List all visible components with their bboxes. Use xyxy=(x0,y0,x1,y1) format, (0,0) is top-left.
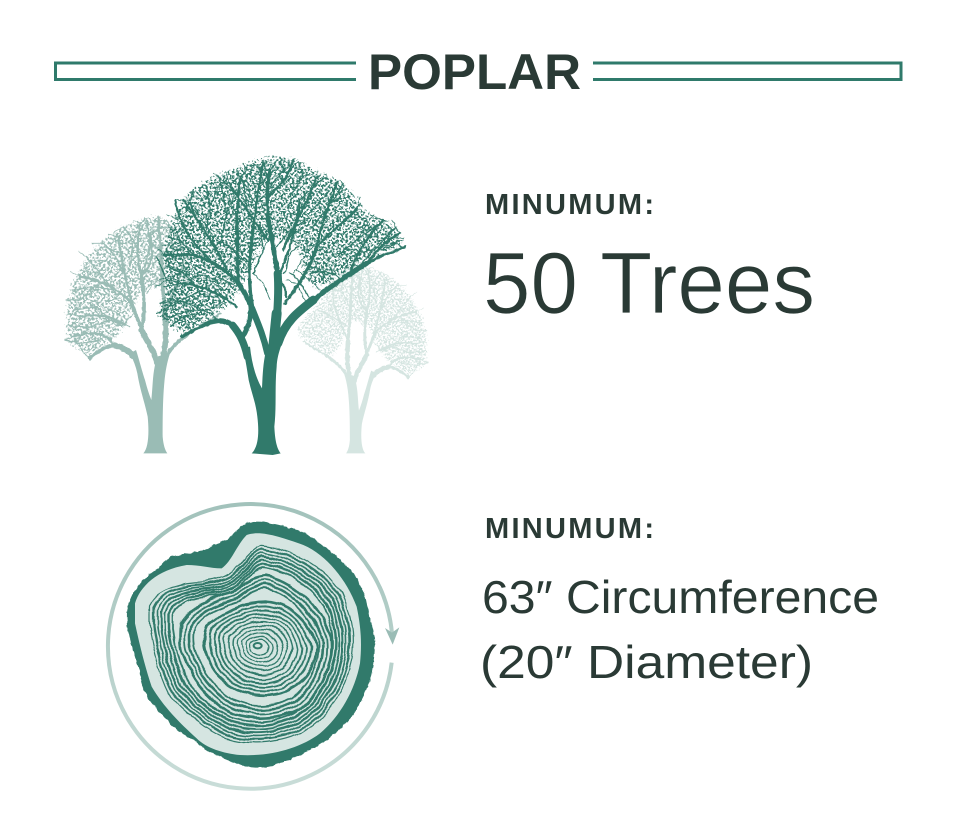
stump sapwood xyxy=(135,533,361,755)
icon: right tree xyxy=(292,261,431,453)
tree pith xyxy=(254,643,262,648)
stump bark xyxy=(127,521,375,768)
growth rings xyxy=(149,545,353,743)
icon: centre tree xyxy=(152,153,408,455)
header rule: left xyxy=(56,63,356,80)
label: circumference minimum: MINUMUM: xyxy=(485,513,654,545)
circumference arc xyxy=(108,504,392,789)
value: diameter: (20″ Diameter) xyxy=(480,636,813,688)
icon: tree stump cross-section with circumference arrow xyxy=(108,504,399,789)
header rule: right xyxy=(593,63,901,80)
icon: three trees xyxy=(62,153,431,455)
icon: left tree xyxy=(62,213,235,453)
title: POPLAR xyxy=(368,44,581,100)
value: 50 Trees: 50 Trees xyxy=(483,235,815,332)
value: circumference: 63″ Circumference xyxy=(482,571,879,623)
label: trees minimum: MINUMUM: xyxy=(485,189,654,221)
arrowhead xyxy=(385,627,399,645)
